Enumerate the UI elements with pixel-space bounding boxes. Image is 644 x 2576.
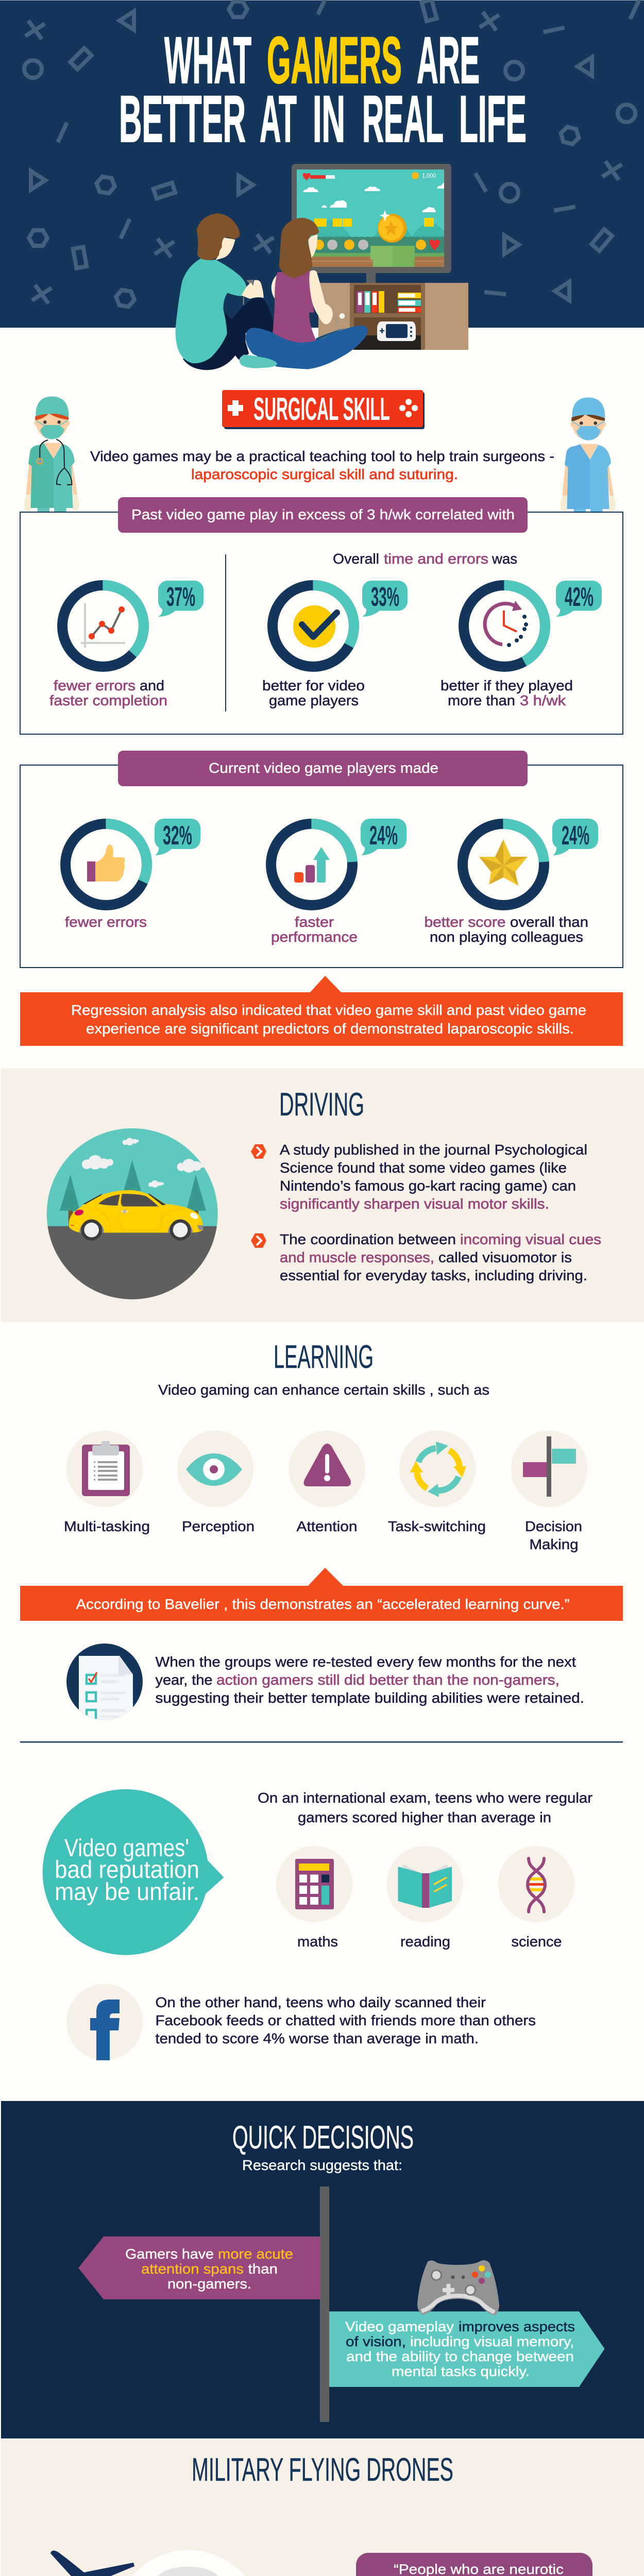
caption: fewer errors [54,677,135,693]
quote bubble [314,2553,592,2576]
title: ARE [417,24,480,97]
icon: game buttons [399,399,418,417]
girl [240,218,368,369]
callout: bad reputation bubble [43,1789,224,1955]
subheading: time and errors [384,551,488,567]
facebook finding: Facebook feeds or chatted with friends more than others [156,2012,536,2028]
icon: check mark [293,605,337,648]
speech bubble [158,581,204,617]
caption: and [140,677,164,693]
icon: rising bars [294,847,330,883]
illustration: car in a circle [46,1128,218,1299]
skill: attention: Attention [297,1518,358,1534]
sign: attention spans [78,2236,320,2299]
subject: reading: reading [400,1934,450,1950]
caption [49,677,167,708]
speech bubble: 37% [166,582,195,612]
sign: vision: and the ability to change between [346,2349,574,2364]
game HUD: 1,000 [422,172,436,179]
icon: handheld console [377,321,416,341]
bullet: visuomotor coordination: incoming visual cues [460,1231,601,1247]
illustration: pilot [115,2550,262,2576]
title [119,24,527,156]
skill: multi-tasking: Multi-tasking [64,1518,150,1534]
title: REAL [362,82,444,156]
panel heading [118,751,528,786]
bullet: visual motor skills: Nintendo’s famous go-kart racing game) can [280,1178,576,1194]
section: military flying drones [1,2438,644,2576]
sign: attention spans: more acute [218,2246,293,2262]
callout: accelerated learning curve: According to Bavelier , this demonstrates an “accelerated learning curve.” [76,1596,570,1612]
title: WHAT [164,24,251,97]
stat: 24 percent better score [425,819,598,945]
subject: maths: maths [297,1934,338,1950]
bullet: visuomotor coordination [251,1231,601,1283]
title: AT [260,82,297,156]
caption: faster completion [49,692,167,708]
illustration: TV cabinet [318,283,468,350]
icon: star [479,839,528,886]
icon: thumbs up [87,844,125,882]
caption: fewer errors [65,914,147,930]
speech bubble [362,581,408,617]
heading: DRIVING [279,1087,364,1123]
skill: task-switching: Task-switching [388,1518,486,1534]
subject: science [498,1846,574,1950]
trees [60,1160,206,1226]
heading badge: surgical skill [222,390,425,429]
panel heading: Current video game players made [209,760,438,776]
heading badge: surgical skill: SURGICAL SKILL [253,392,390,427]
stat: 33 percent [262,581,408,708]
skill: perception [177,1431,255,1534]
bullet: visuomotor coordination: The coordination between [280,1231,456,1247]
caption: non playing colleagues [430,929,583,945]
sign: attention spans: than [248,2261,278,2277]
heading: LEARNING [274,1339,374,1375]
illustration: green surgeon [24,396,79,512]
icon: facebook f [90,1999,120,2060]
subject: science: science [511,1934,562,1950]
sign: attention spans: Gamers have [125,2246,214,2262]
caption [425,914,588,945]
icon: calculator [295,1859,334,1909]
sign: attention spans: non-gamers. [167,2276,251,2292]
caption: better for video [262,677,365,693]
facebook finding [66,1984,536,2060]
section: learning [20,1339,623,2060]
sign: vision: mental tasks quickly. [392,2364,530,2379]
sign: attention spans: attention spans [141,2261,244,2277]
stat: 42 percent [440,581,602,708]
bullet: visual motor skills: significantly sharpen visual motor skills. [280,1196,549,1212]
facebook finding: tended to score 4% worse than average in math. [156,2030,479,2046]
speech bubble [556,581,602,617]
sign: vision: of vision, [346,2334,406,2349]
exam scores text [258,1790,592,1825]
heading: MILITARY FLYING DRONES [192,2452,453,2488]
panel heading: Past video game play in excess of 3 h/wk correlated with [131,506,515,522]
callout: bad reputation bubble: bad reputation [55,1856,199,1884]
title: GAMERS [267,24,402,97]
intro text: Video gaming can enhance certain skills , such as [158,1382,489,1398]
game HUD [303,172,436,180]
panel heading [118,497,528,533]
icon: cycle arrows [410,1442,466,1497]
stethoscope [37,439,72,485]
stat: 32 percent [65,819,200,930]
surgical intro text [90,448,554,482]
icon: DNA helix [528,1858,545,1912]
illustration: TV and game screen [292,164,451,283]
caption [440,677,573,708]
caption: game players [269,692,359,708]
callout: regression analysis: experience are significant predictors of demonstrated laparoscopic skills. [86,1021,574,1037]
speech bubble [155,819,200,855]
icon: signpost [523,1436,576,1497]
panel: current video game players [20,751,623,968]
subheading [333,551,517,567]
sign: vision: including visual memory, [410,2334,574,2349]
subheading: Research suggests that: [242,2157,402,2173]
caption: 3 h/wk [520,692,566,708]
exam scores text: gamers scored higher than average in [298,1809,551,1825]
sign: vision: improves aspects [459,2319,575,2334]
icon: line graph [81,603,125,648]
icon: clipboard [82,1441,130,1496]
subject: maths [276,1846,352,1950]
caption: faster [295,914,334,930]
boy [176,213,274,370]
callout: bad reputation bubble: Video games' [64,1835,189,1862]
panel: past video game play [20,497,623,734]
icon: eye [186,1453,242,1486]
caption: overall than [510,914,588,930]
icon: warning triangle [304,1444,351,1486]
car [69,1190,203,1241]
callout: regression analysis [20,976,623,1046]
bullet: visual motor skills [251,1142,587,1212]
bullet: visual motor skills: A study published in the journal Psychological [280,1142,587,1158]
icon: game controller [417,2260,499,2315]
caption: better score [425,914,506,930]
skill: decision making: Making [530,1536,578,1552]
surgical intro text: laparoscopic surgical skill and suturing. [191,466,458,482]
caption [271,914,358,945]
subject: reading [386,1846,463,1950]
caption: performance [271,929,358,945]
title: IN [313,82,345,156]
infographic: LIFE [459,82,527,156]
bullet: visual motor skills: Science found that some video games (like [280,1160,567,1176]
section: quick decisions [1,2101,644,2438]
sign: vision: Video gameplay [345,2319,454,2334]
icon: plus [228,400,243,416]
signpost pole [320,2187,329,2422]
facebook finding: On the other hand, teens who daily scanned their [156,1994,486,2010]
speech bubble: 24% [369,821,398,851]
callout: bad reputation bubble: may be unfair. [55,1878,199,1906]
caption: better if they played [440,677,573,693]
icon: airplane [50,2551,139,2576]
section: driving [1,1069,644,1322]
illustration: two gamers on the floor [176,213,368,370]
sign: vision [329,2311,605,2387]
speech bubble [552,819,598,855]
speech bubble: 32% [163,821,192,851]
icon: checklist document [66,1643,143,1721]
caption [262,677,365,708]
re-test finding: suggesting their better template building abilities were retained. [156,1690,584,1706]
illustration: blue surgeon [561,397,616,513]
stat: 24 percent faster [271,819,406,945]
stat: 37 percent [49,581,204,708]
icon: open book [398,1865,452,1908]
subheading: was [492,551,517,567]
subheading: Overall [333,551,379,567]
skill: decision making: Decision [525,1518,582,1534]
callout: accelerated learning curve [20,1568,623,1621]
bullet: visuomotor coordination: called visuomotor is [438,1249,572,1265]
callout: regression analysis: Regression analysis also indicated that video game skill and past video game [71,1002,586,1018]
exam scores text: On an international exam, teens who were regular [258,1790,592,1806]
skill: task-switching [388,1431,486,1534]
heading: QUICK DECISIONS [232,2120,414,2156]
skill: decision making [511,1431,587,1552]
skill: perception: Perception [182,1518,255,1534]
caption: more than [448,692,515,708]
speech bubble: 24% [562,821,589,851]
title: BETTER [119,82,246,156]
surgical intro text: Video games may be a practical teaching tool to help train surgeons - [90,448,554,464]
bullet: visuomotor coordination: and muscle responses, [280,1249,434,1265]
bullet: visuomotor coordination: essential for everyday tasks, including driving. [280,1267,587,1283]
re-test finding: action gamers still did better than the non-gamers, [216,1672,560,1688]
re-test finding [66,1643,584,1721]
icon: clock [485,601,528,647]
hero banner [0,0,644,328]
speech bubble: 33% [371,582,399,612]
skill: attention [289,1431,365,1534]
speech bubble [361,819,406,855]
clouds [82,1138,205,1188]
speech bubble: 42% [565,582,594,612]
re-test finding: year, the [156,1672,212,1688]
re-test finding: When the groups were re-tested every few months for the next [156,1654,576,1670]
skill: multi-tasking [64,1431,150,1534]
